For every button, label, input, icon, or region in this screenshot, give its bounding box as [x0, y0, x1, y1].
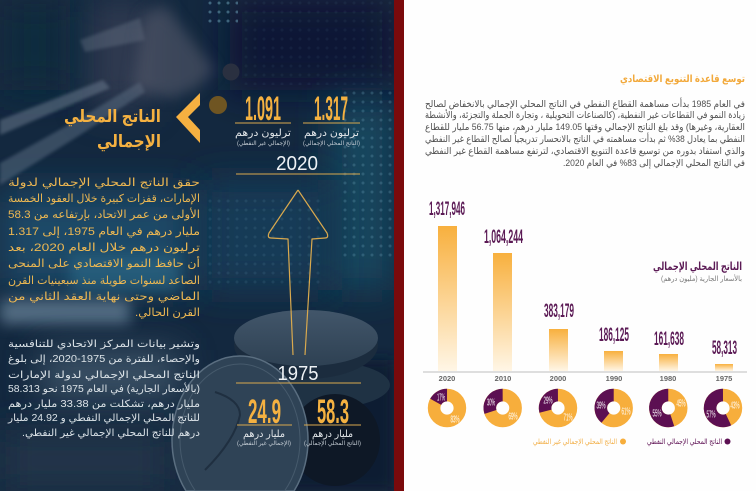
text block: gold paragraph: أن حافظ النمو الاقتصادي على المنحى: [8, 256, 200, 270]
text block: white paragraph: للناتج المحلي الإجمالي النفطي و 24.92 مليار: [7, 413, 200, 424]
donut percentage labels: 69%: [508, 412, 518, 422]
icon: gold chevron: [176, 93, 200, 143]
text block: right paragraph: النفطي بما يعادل 38% ثم بدأت مساهمته في الناتج بالانحسار تدريجياً لصالح القطاع غير النفطي: [425, 132, 745, 145]
panel: dark red divider strip: [394, 0, 404, 491]
donut percentage labels: 61%: [622, 406, 631, 418]
stat: non-oil GDP 1975: (الإجمالي غير النفطي): [237, 440, 291, 447]
icon: coin stack background: [172, 310, 394, 491]
stat: GDP 1975: [304, 393, 361, 447]
donut percentage labels: 29%: [544, 396, 553, 406]
text block: right paragraph: في العام 1985 بدأت مساهمة القطاع النفطي في الناتج المحلي الإجمالي بالانخفاض لصالح: [425, 97, 745, 110]
year axis labels: [439, 374, 732, 383]
text block: right paragraph: العقارية، وغيرها) وقد بلغ الناتج الإجمالي وقتها 149.05 مليار درهم، منها 56.75 مليار للقطاع: [425, 122, 745, 133]
stat: GDP 1975: مليار درهم: [312, 429, 353, 440]
text block: gold paragraph: [8, 177, 200, 319]
donut percentage labels: 83%: [450, 414, 460, 426]
stat: non-oil GDP 1975: [237, 393, 292, 447]
text block: gold paragraph: مليار درهم في العام 1975، إلى 1.317: [8, 226, 200, 238]
text block: white paragraph: [7, 339, 200, 439]
stat: oil-inclusive GDP 2020: 1.317: [314, 90, 348, 128]
year axis labels: 2020: [439, 374, 455, 383]
stat: oil-inclusive GDP 2020: [303, 90, 360, 147]
text: 43%: [730, 400, 740, 412]
stat: oil-inclusive GDP 2020: ترليون درهم: [304, 128, 359, 139]
bar values: 383,179: [544, 301, 574, 322]
text block: gold paragraph: حقق الناتج المحلي الإجمالي لدولة: [8, 177, 200, 190]
text block: white paragraph: الناتج المحلي الإجمالي لدولة الإمارات: [8, 370, 200, 381]
donut percentage labels: [437, 392, 740, 426]
stats: 2020: [235, 90, 360, 175]
text block: right paragraph: [425, 97, 745, 169]
text block: gold paragraph: الصاعد لسنوات طويلة منذ سبعينيات القرن: [8, 275, 200, 287]
label: year 2020: 2020: [276, 153, 318, 175]
text block: gold paragraph: القرن الحالي.: [135, 307, 200, 319]
text block: white paragraph: وتشير بيانات المركز الاتحادي للتنافسية: [8, 339, 200, 350]
text block: gold paragraph: الإمارات، قفزات كبيرة خلال العقود الخمسة: [8, 193, 200, 205]
stat: non-oil GDP 2020: (الإجمالي غير النفطي): [237, 140, 290, 147]
donut 1980: [652, 392, 685, 424]
chart title: [653, 261, 742, 283]
year axis labels: 1980: [660, 374, 676, 383]
legend: [533, 437, 730, 446]
donut 2010: [486, 392, 519, 424]
bar values: 186,125: [599, 325, 629, 346]
stat: oil-inclusive GDP 2020: (الناتج المحلي الإجمالي): [303, 140, 360, 147]
stats: 1975: [236, 363, 361, 447]
text block: white paragraph: مليار درهم، تشكلت من 33.38 مليار درهم: [8, 399, 200, 410]
stat: non-oil GDP 1975: مليار درهم: [243, 429, 285, 440]
text block: gold paragraph: ترليون درهم خلال العام 2020، بعد: [8, 242, 200, 254]
donut 2000: [542, 392, 574, 424]
chart: oil and non-oil share donuts: [429, 390, 740, 426]
chart: GDP bar chart: [423, 199, 747, 383]
donut percentage labels: 39%: [596, 400, 606, 412]
heading: GDP title: [64, 107, 161, 152]
text block: gold paragraph: الأولى من عمر الاتحاد، بإرتفاعه من 58.3: [8, 207, 200, 221]
legend item: non-oil GDP: الناتج المحلي الإجمالي غير النفطي: [533, 437, 617, 446]
arrow: growth arrow: [268, 190, 328, 355]
text block: white paragraph: والإحصاء، للفترة من 1975-2020، إلى بلوغ: [8, 354, 200, 365]
donut 1990: [596, 390, 632, 426]
icon: decorative circles: [209, 64, 240, 114]
stat: non-oil GDP 2020: 1.091: [245, 90, 281, 128]
stat: GDP 1975: (الناتج المحلي الإجمالي): [304, 440, 361, 447]
year axis labels: 2000: [550, 374, 566, 383]
donut 2020: [429, 390, 465, 426]
bar values: [429, 199, 737, 359]
stat: non-oil GDP 1975: 24.9: [248, 393, 281, 431]
text block: right paragraph: في الناتج المحلي الإجمالي إلى 83% في العام 2020.: [563, 158, 745, 169]
text block: white paragraph: (بالأسعار الجارية) في العام 1975 نحو 58.313: [8, 382, 200, 395]
legend item: oil GDP: الناتج المحلي الإجمالي النفطي: [647, 437, 722, 446]
panel: left dark photo background: [0, 0, 394, 491]
stat: GDP 1975: 58.3: [317, 393, 349, 431]
stat: non-oil GDP 2020: [235, 90, 291, 147]
donut percentage labels: 30%: [487, 398, 495, 408]
chart title: بالأسعار الجارية (مليون درهم): [661, 274, 742, 283]
year axis labels: 2010: [495, 374, 511, 383]
year axis labels: 1975: [716, 374, 732, 383]
bar values: 1,064,244: [484, 227, 523, 248]
label: year 1975: 1975: [278, 363, 318, 385]
heading: GDP title: الناتج المحلي: [64, 107, 161, 127]
donut percentage labels: 55%: [652, 408, 662, 420]
year axis labels: 1990: [606, 374, 622, 383]
heading: GDP title: الإجمالي: [97, 132, 161, 152]
bar values: 1,317,946: [429, 199, 465, 220]
donut percentage labels: 45%: [676, 398, 686, 410]
donut percentage labels: 17%: [437, 392, 445, 404]
text block: white paragraph: درهم للناتج المحلي الإجمالي غير النفطي.: [22, 428, 200, 439]
panel: right white page: [394, 0, 756, 491]
text block: gold paragraph: الماضي وحتى نهاية العقد الثاني من: [8, 291, 200, 303]
donut 1975: [706, 391, 740, 425]
donut percentage labels: 57%: [706, 410, 716, 420]
bars: [438, 226, 733, 371]
donut percentage labels: 71%: [564, 412, 573, 424]
stat: non-oil GDP 2020: ترليون درهم: [235, 128, 291, 139]
bar values: 161,638: [654, 329, 684, 350]
